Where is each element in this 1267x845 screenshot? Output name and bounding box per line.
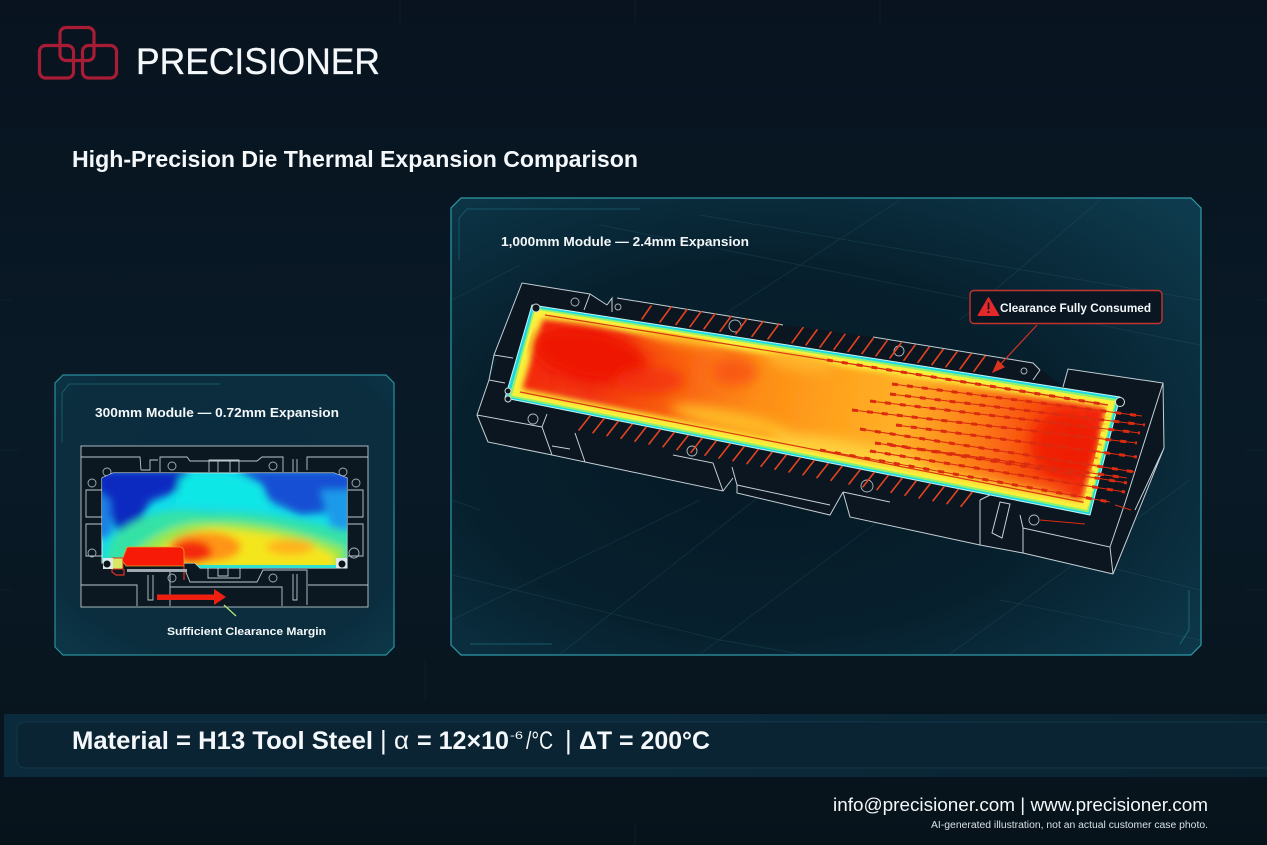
- panel: 300mm module: [55, 375, 394, 655]
- callout: clearance fully consumed: [970, 290, 1162, 324]
- label: sufficient clearance margin: Sufficient Clearance Margin: [167, 626, 326, 638]
- panel heading: 300mm: 300mm Module — 0.72mm Expansion: [95, 405, 339, 420]
- material text: α: [394, 727, 409, 755]
- arrows: longitudinal expansion: [820, 360, 1145, 524]
- material text: [72, 725, 710, 755]
- footer: disclaimer: AI-generated illustration, not an actual customer case photo.: [931, 820, 1208, 831]
- hot zone: red block: [122, 547, 184, 566]
- material text: |: [380, 725, 387, 755]
- icon: warning triangle: [978, 298, 999, 316]
- material text: /°C: [526, 727, 553, 755]
- material text: Material = H13 Tool Steel: [72, 727, 373, 755]
- material text: |: [565, 725, 572, 755]
- die outline: 1000mm: [477, 283, 1164, 574]
- heat map: 300mm plate: [96, 470, 352, 580]
- leader line: [224, 605, 236, 616]
- footer: contact: info@precisioner.com | www.precisioner.com: [833, 794, 1208, 815]
- arrows: top edge expansion: [642, 306, 985, 371]
- die outline: 300mm: [81, 446, 368, 607]
- panel heading: 1000mm: 1,000mm Module — 2.4mm Expansion: [501, 234, 749, 249]
- arrow: small expansion: [157, 589, 226, 605]
- title: High-Precision Die Thermal Expansion Comparison: [72, 146, 638, 172]
- material text: ΔT = 200°C: [579, 727, 710, 755]
- arrows: bottom edge expansion: [579, 416, 972, 506]
- material text: -6: [510, 730, 523, 742]
- plate inner outline: [520, 315, 1108, 503]
- logo: Precisioner: [40, 28, 380, 82]
- material text: = 12×10: [417, 727, 509, 755]
- logo mark: three linked squares: [40, 28, 116, 78]
- arrow: callout pointer: [993, 325, 1037, 372]
- material bar: [4, 714, 1267, 777]
- callout text: Clearance Fully Consumed: [1000, 303, 1151, 315]
- panel: 1000mm module: [451, 198, 1201, 655]
- logo wordmark: PRECISIONER: [136, 41, 380, 82]
- heat map: 1000mm plate: [505, 304, 1124, 515]
